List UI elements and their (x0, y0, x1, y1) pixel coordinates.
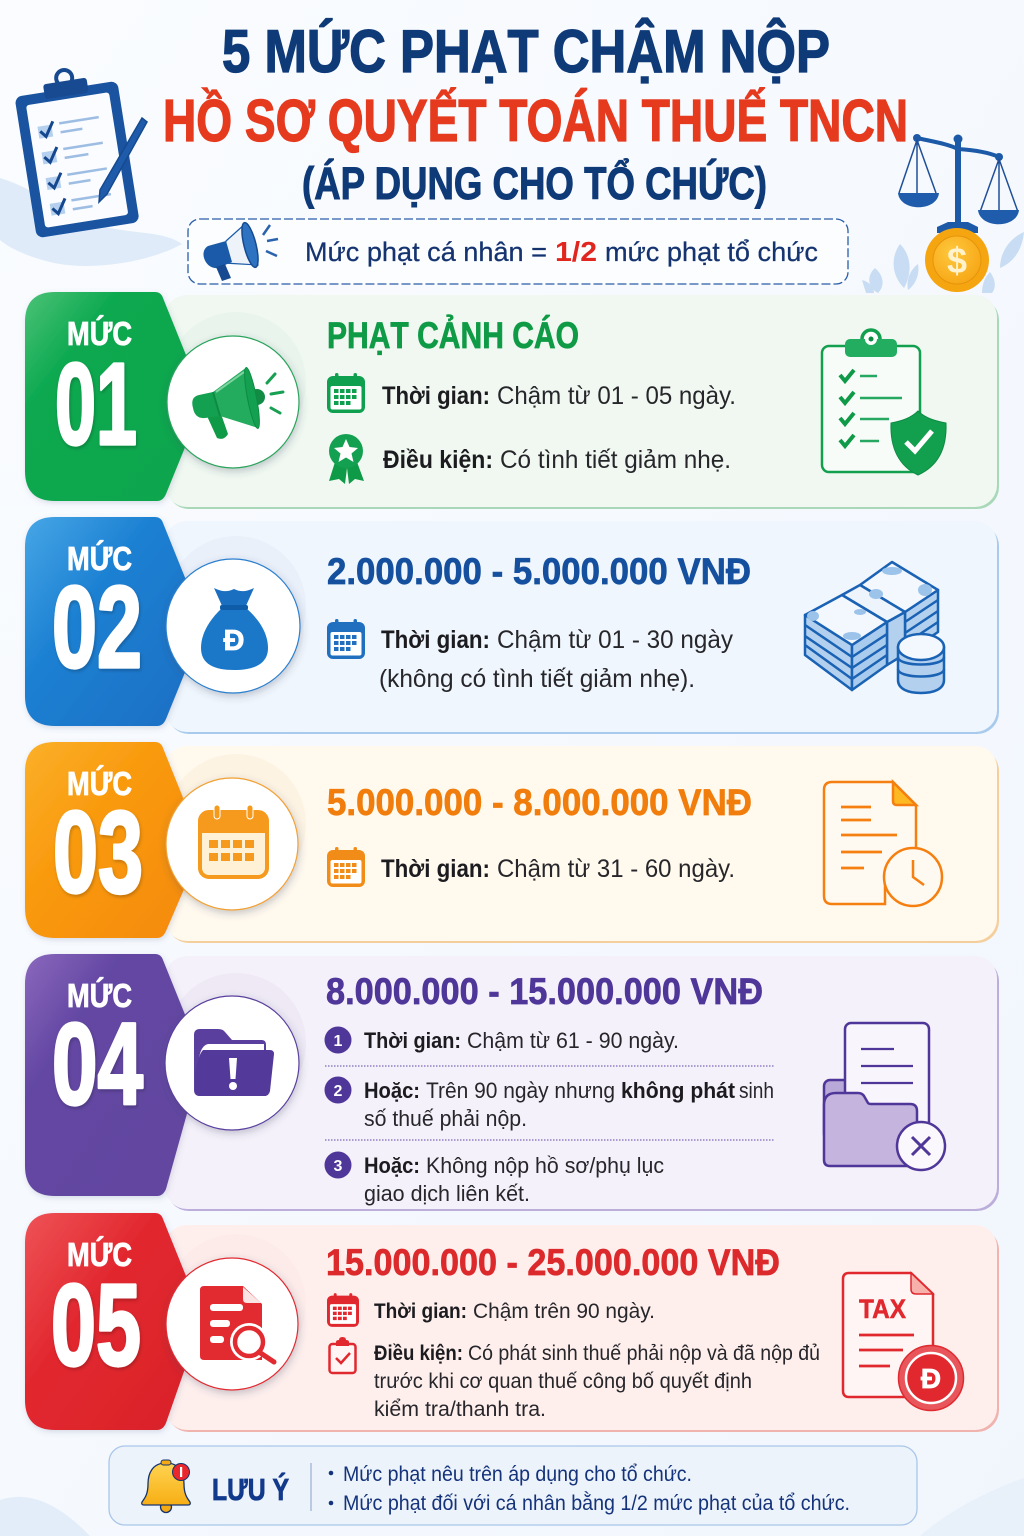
condition text: trước khi cơ quan thuế công bố quyết định (374, 1370, 752, 1393)
icon: calendar (327, 847, 365, 887)
note bullets (329, 1462, 850, 1515)
icon: tax document with dong coin: TAX (859, 1294, 906, 1324)
icon: folder warning circle (165, 996, 299, 1130)
leaves (862, 232, 1024, 293)
card body (165, 1225, 999, 1432)
icon: money bag circle: Đ (224, 625, 244, 657)
list item 3: 3 (334, 1158, 343, 1175)
condition row (383, 446, 731, 474)
list item 2: sinh (739, 1078, 774, 1103)
note label: LƯU Ý (212, 1472, 289, 1507)
level badge: MỨC (67, 540, 132, 577)
icon: tax document with dong coin (843, 1273, 964, 1410)
list item 2: số thuế phải nộp. (364, 1106, 527, 1131)
icon: blue megaphone (203, 221, 278, 281)
level badge: 02 (52, 562, 142, 692)
icon: money stacks and coins (805, 562, 944, 693)
card body (165, 521, 999, 734)
callout: individual penalty: 1/2 (555, 236, 597, 267)
panel: level 04 (25, 954, 999, 1211)
list item 2 (324, 1076, 774, 1131)
condition text (374, 1342, 820, 1421)
time row: Chậm từ 01 - 30 ngày (497, 626, 733, 654)
panel: level 03 (25, 742, 999, 943)
icon: calendar (327, 373, 365, 413)
panel: level 02 (25, 517, 999, 734)
time row (382, 382, 736, 410)
list item 1: Thời gian: (364, 1028, 461, 1053)
level badge (25, 292, 188, 501)
callout text: Mức phạt cá nhân = (305, 237, 547, 267)
icon: bell (142, 1460, 190, 1512)
heading: 2.000.000 - 5.000.000 VNĐ (327, 551, 751, 592)
level badge: 04 (52, 999, 143, 1129)
list item 3: giao dịch liên kết. (364, 1181, 530, 1206)
condition text: Điều kiện: (374, 1342, 463, 1365)
level badge (25, 954, 188, 1196)
gold coin (925, 228, 989, 292)
heading: 5.000.000 - 8.000.000 VNĐ (327, 782, 752, 823)
note bullets: Mức phạt nêu trên áp dụng cho tổ chức. (343, 1462, 692, 1486)
list item 3 (324, 1152, 664, 1206)
icon: clipboard and pen (12, 62, 147, 238)
level badge: MỨC (67, 1236, 132, 1273)
level badge: 03 (53, 787, 143, 917)
icon: megaphone circle (167, 336, 299, 468)
level badge: 01 (55, 339, 137, 469)
icon: checklist clipboard (330, 1337, 356, 1373)
time row: Thời gian: (382, 382, 490, 410)
list item 3: Không nộp hồ sơ/phụ lục (426, 1153, 664, 1178)
level badge: MỨC (67, 977, 132, 1014)
panel: level 01 (25, 292, 999, 509)
level badge (25, 517, 188, 726)
list item 1: 1 (334, 1033, 343, 1050)
time row (374, 1300, 655, 1323)
level badge (25, 742, 188, 938)
title line 3: (ÁP DỤNG CHO TỔ CHỨC) (302, 158, 767, 209)
condition row: Điều kiện: (383, 446, 493, 474)
time row: Chậm từ 01 - 05 ngày. (497, 382, 736, 410)
icon: calendar (327, 619, 365, 659)
note bullets: Mức phạt đối với cá nhân bằng 1/2 mức phạt của tổ chức. (343, 1490, 850, 1515)
list item 2: Hoặc: (364, 1078, 420, 1103)
time row: Chậm từ 31 - 60 ngày. (497, 855, 735, 883)
icon: calendar (327, 1293, 359, 1327)
condition text: Có phát sinh thuế phải nộp và đã nộp đủ (468, 1342, 820, 1365)
heading: PHẠT CẢNH CÁO (327, 315, 579, 356)
condition row: Có tình tiết giảm nhẹ. (500, 446, 731, 474)
list item 2: 2 (334, 1083, 343, 1100)
time row: Thời gian: (381, 855, 490, 883)
heading: 15.000.000 - 25.000.000 VNĐ (326, 1242, 780, 1283)
icon: scales with coin (862, 134, 1024, 293)
icon: calendar circle (166, 778, 298, 910)
list item 1: Chậm từ 61 - 90 ngày. (467, 1028, 679, 1053)
level badge (25, 1213, 188, 1430)
time row: Chậm trên 90 ngày. (473, 1300, 655, 1323)
panel: level 05 (25, 1213, 999, 1432)
callout: individual penalty (188, 219, 848, 284)
level badge: MỨC (67, 765, 132, 802)
icon: document with clock (824, 782, 942, 906)
list item 1 (324, 1026, 679, 1054)
time row (381, 855, 735, 883)
title (163, 18, 908, 209)
list item 2: Trên 90 ngày nhưng (426, 1078, 615, 1103)
list item 2: không phát (621, 1078, 735, 1103)
time row: Thời gian: (374, 1300, 467, 1323)
level badge: 05 (51, 1260, 141, 1390)
gold coin: $ (947, 240, 967, 281)
list item 3: Hoặc: (364, 1153, 420, 1178)
time row (379, 626, 733, 693)
card body (165, 956, 999, 1211)
icon: clipboard with shield (822, 330, 946, 475)
callout: individual penalty: mức phạt tổ chức (605, 237, 818, 267)
icon: money bag circle (166, 559, 300, 693)
condition text: kiểm tra/thanh tra. (374, 1398, 546, 1421)
card body (165, 295, 999, 509)
time row: Thời gian: (381, 626, 490, 654)
card body (165, 746, 999, 943)
icon: award ribbon (329, 434, 364, 484)
time row: (không có tình tiết giảm nhẹ). (379, 665, 695, 693)
title line 1: 5 MỨC PHẠT CHẬM NỘP (222, 18, 830, 85)
icon: tax document with dong coin: Đ (921, 1363, 941, 1394)
icon: folder with document and cross (824, 1023, 945, 1170)
note panel (109, 1446, 917, 1525)
level badge: MỨC (67, 315, 132, 352)
heading: 8.000.000 - 15.000.000 VNĐ (326, 971, 763, 1012)
icon: document search circle (166, 1258, 298, 1390)
